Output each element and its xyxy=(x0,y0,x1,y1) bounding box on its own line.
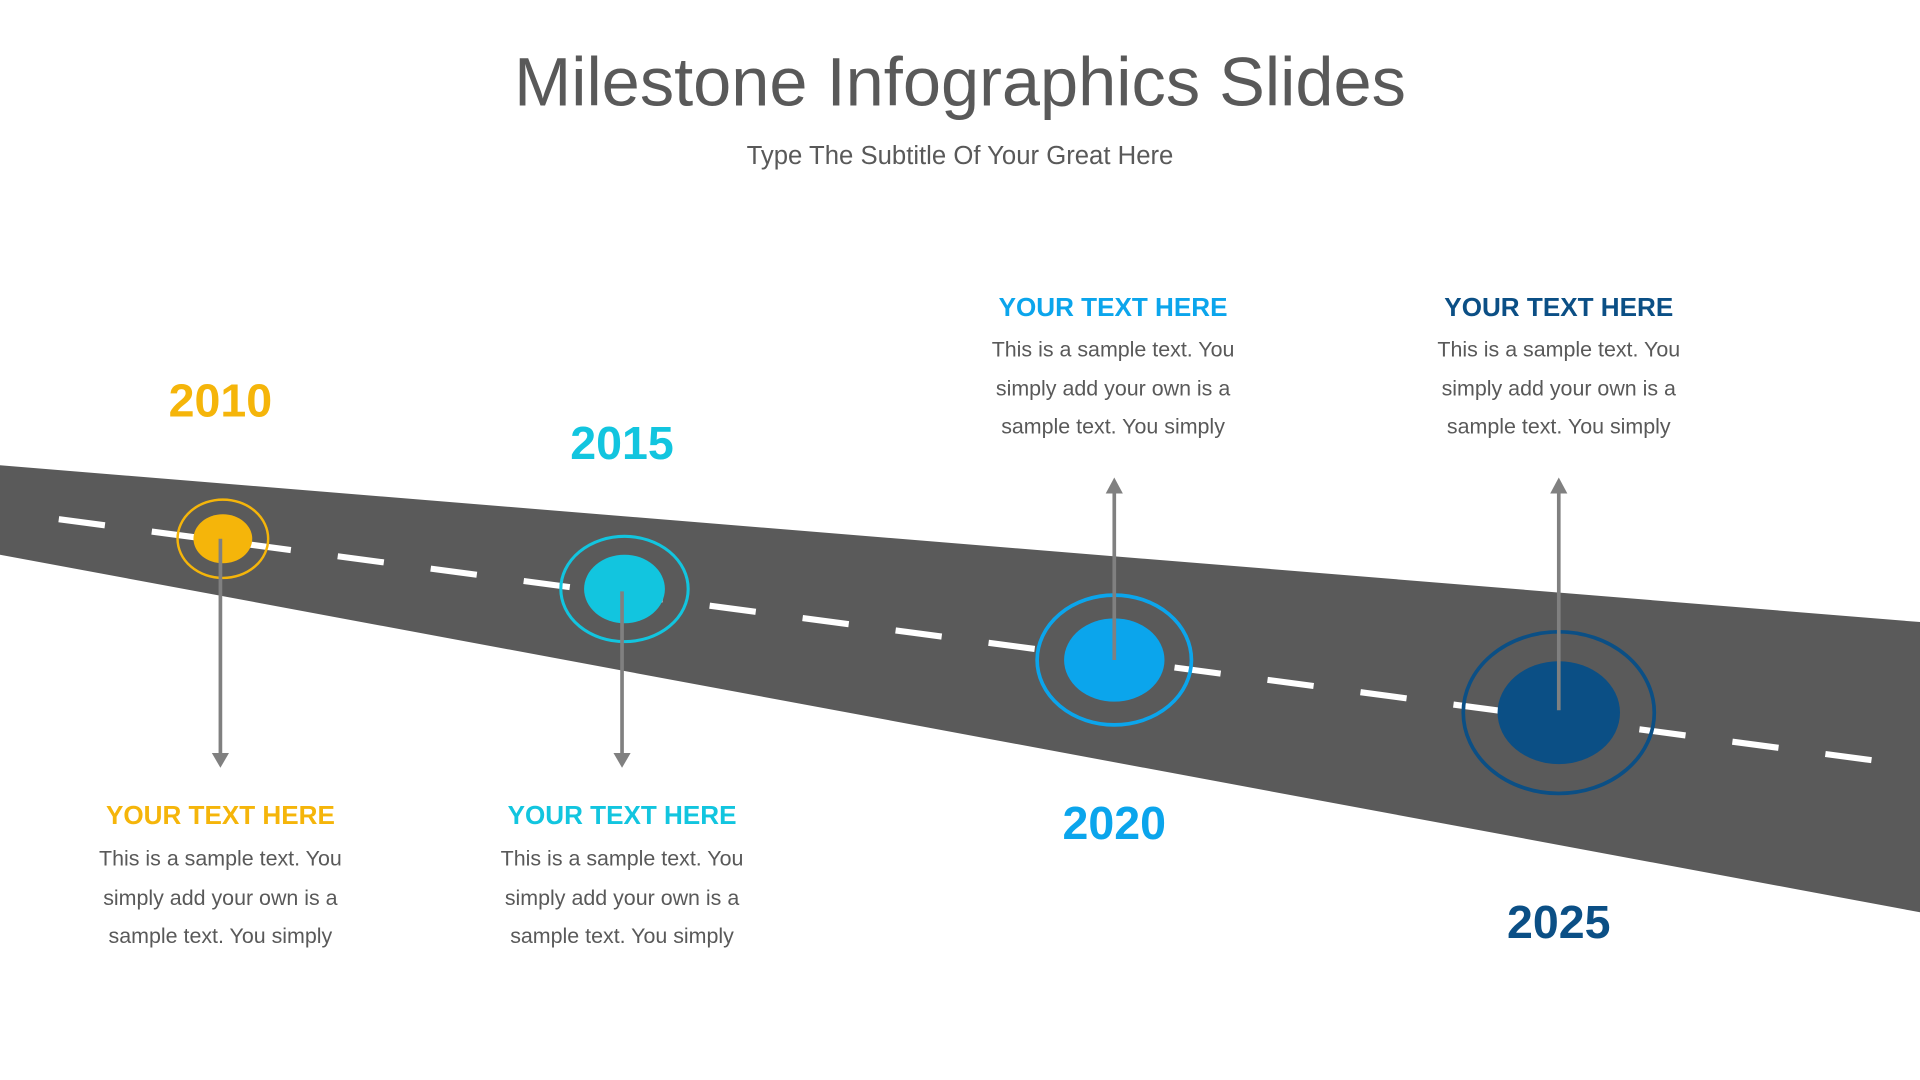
icon: marker 2010 xyxy=(178,500,268,578)
text block 2015: This is a sample text. You xyxy=(501,847,743,871)
milestone 2010 xyxy=(99,374,342,948)
arrow 2025 xyxy=(1550,478,1567,710)
text block 2025: simply add your own is a xyxy=(1442,377,1676,401)
milestone 2015 xyxy=(501,417,743,948)
text block 2010: sample text. You simply xyxy=(109,924,333,948)
text block 2015 xyxy=(501,800,743,948)
text block 2025 xyxy=(1437,292,1680,438)
text block 2020: sample text. You simply xyxy=(1001,414,1225,438)
subtitle: Type The Subtitle Of Your Great Here xyxy=(747,142,1173,170)
year 2015: 2015 xyxy=(570,417,674,469)
arrow 2015 xyxy=(613,591,631,768)
text block 2025: YOUR TEXT HERE xyxy=(1444,292,1673,322)
text block 2010 xyxy=(99,800,342,948)
title: Milestone Infographics Slides xyxy=(514,43,1406,120)
milestone 2025 xyxy=(1437,292,1680,948)
year 2025: 2025 xyxy=(1507,896,1611,948)
year 2010: 2010 xyxy=(169,374,272,426)
text block 2025: sample text. You simply xyxy=(1447,414,1671,438)
text block 2010: This is a sample text. You xyxy=(99,847,342,871)
road xyxy=(0,465,1920,912)
arrow 2010 xyxy=(212,539,229,768)
arrow 2020 xyxy=(1106,478,1123,660)
icon: marker 2025 xyxy=(1463,632,1654,793)
text block 2020: YOUR TEXT HERE xyxy=(999,292,1228,322)
text block 2015: YOUR TEXT HERE xyxy=(508,800,737,830)
text block 2020: This is a sample text. You xyxy=(992,337,1234,361)
text block 2010: simply add your own is a xyxy=(103,886,338,910)
milestone 2020 xyxy=(992,292,1234,849)
text block 2025: This is a sample text. You xyxy=(1437,337,1680,361)
text block 2015: sample text. You simply xyxy=(510,924,734,948)
text block 2010: YOUR TEXT HERE xyxy=(106,800,335,830)
year 2020: 2020 xyxy=(1063,797,1166,849)
text block 2015: simply add your own is a xyxy=(505,886,739,910)
icon: marker 2015 xyxy=(561,536,688,642)
text block 2020: simply add your own is a xyxy=(996,377,1230,401)
icon: marker 2020 xyxy=(1037,595,1191,725)
text block 2020 xyxy=(992,292,1234,438)
